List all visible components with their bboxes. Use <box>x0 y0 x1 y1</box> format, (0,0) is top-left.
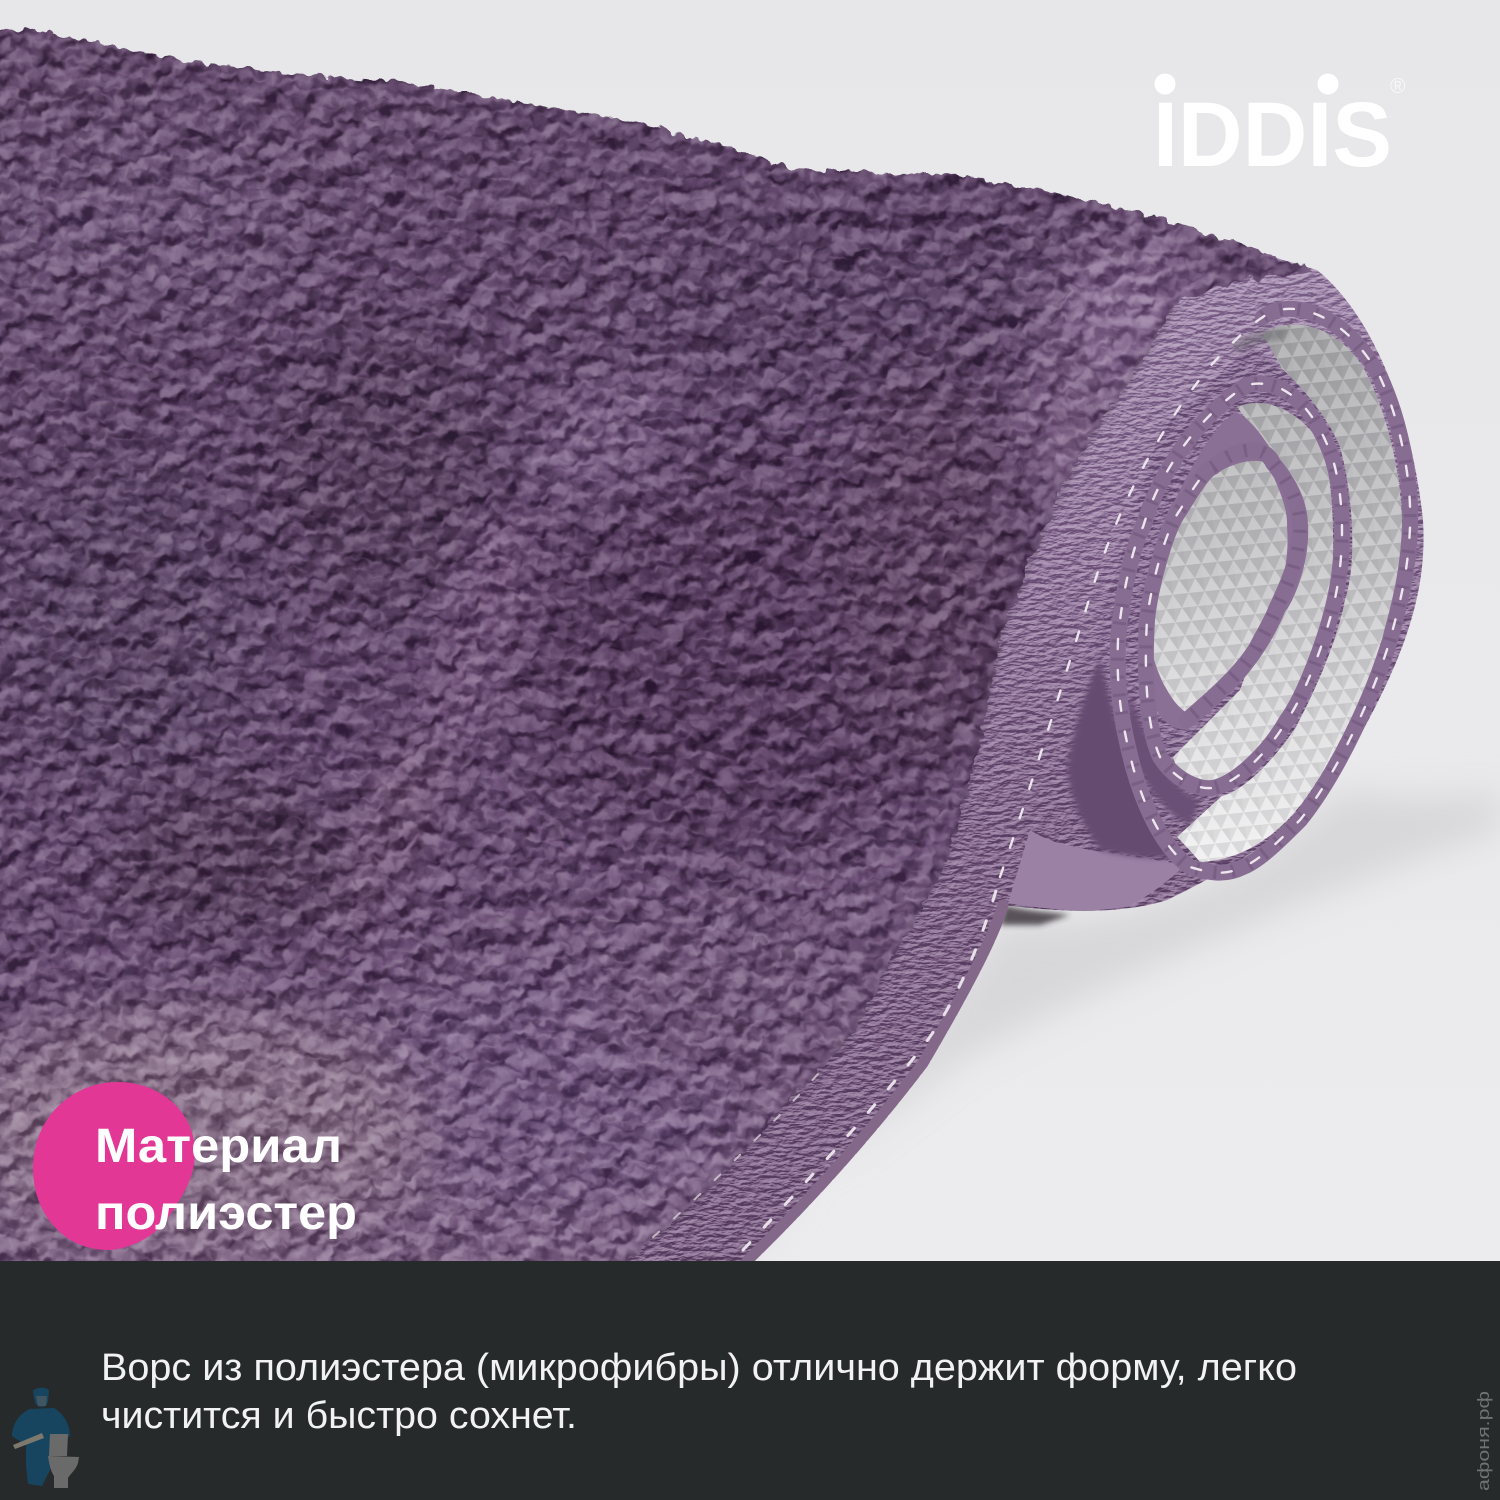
heading: material polyester <box>95 1120 357 1240</box>
roll: lower pile below the coil <box>1008 830 1185 910</box>
pile: dark crevices <box>0 32 1267 1261</box>
icon: plumber with toilet <box>12 1388 79 1488</box>
roll: dark inner fold <box>1125 690 1200 825</box>
toilet tank <box>49 1434 68 1456</box>
binding: pale scallop along the outer edge <box>747 905 1003 1261</box>
rolled mat end <box>600 225 1430 1265</box>
description text <box>101 1347 1297 1437</box>
pile: bumpy shaded tufts <box>0 27 1320 1261</box>
roll: fabric silhouette and binding with weave texture <box>600 225 1430 1265</box>
callout: pink blob <box>33 1082 195 1250</box>
plumber head and cap <box>33 1388 49 1407</box>
floor shadow beneath the mat <box>700 790 1500 1261</box>
coil: purple band <box>1118 309 1410 873</box>
plumber body <box>12 1408 70 1486</box>
roll: third fabric turn <box>1140 412 1308 730</box>
pile: tonal patches <box>0 130 1220 1250</box>
footer band <box>0 1261 1500 1500</box>
logo wordmark: IDDIS <box>1153 84 1392 186</box>
logo: registered mark: ® <box>1390 75 1406 98</box>
binding: inner shadow along pile edge <box>625 303 1177 1261</box>
roll: grey backing, core <box>1154 460 1288 712</box>
plumber face <box>36 1396 47 1406</box>
roll: inner shadows on the folds <box>1232 328 1290 352</box>
binding weave <box>625 303 1177 1261</box>
pile: base colour <box>0 26 1320 1261</box>
heading line 2: полиэстер <box>95 1187 357 1240</box>
description line 2: чистится и быстро сохнет. <box>101 1395 577 1437</box>
roll: dark outer fold <box>1067 657 1180 858</box>
logo: IDDIS <box>1153 74 1406 186</box>
coil: white stitching spiral <box>1000 309 1410 877</box>
coil: knotted stitch shading <box>1118 309 1410 873</box>
watermark: афоня.рф <box>1474 1391 1493 1491</box>
binding: white stitching down the mat edge <box>743 877 1000 1250</box>
toilet bowl <box>48 1456 79 1488</box>
roll: grey backing, middle turn <box>1173 403 1334 780</box>
roll: underside shadow <box>1000 905 1070 925</box>
heading line 1: Материал <box>95 1120 342 1173</box>
spiral binding: coil band <box>653 309 1410 1250</box>
roll: second fabric turn <box>1108 345 1352 828</box>
logo: dot of fourth letter <box>1318 74 1338 94</box>
logo: dot of first letter <box>1154 74 1176 94</box>
roll: grey backing, outer turn <box>1177 324 1402 862</box>
mat pile surface <box>0 26 1320 1261</box>
description line 1: Ворс из полиэстера (микрофибры) отлично держит форму, легко <box>101 1347 1297 1389</box>
binding: second inner stitch line <box>653 1060 830 1237</box>
plumber wrench <box>13 1433 44 1449</box>
